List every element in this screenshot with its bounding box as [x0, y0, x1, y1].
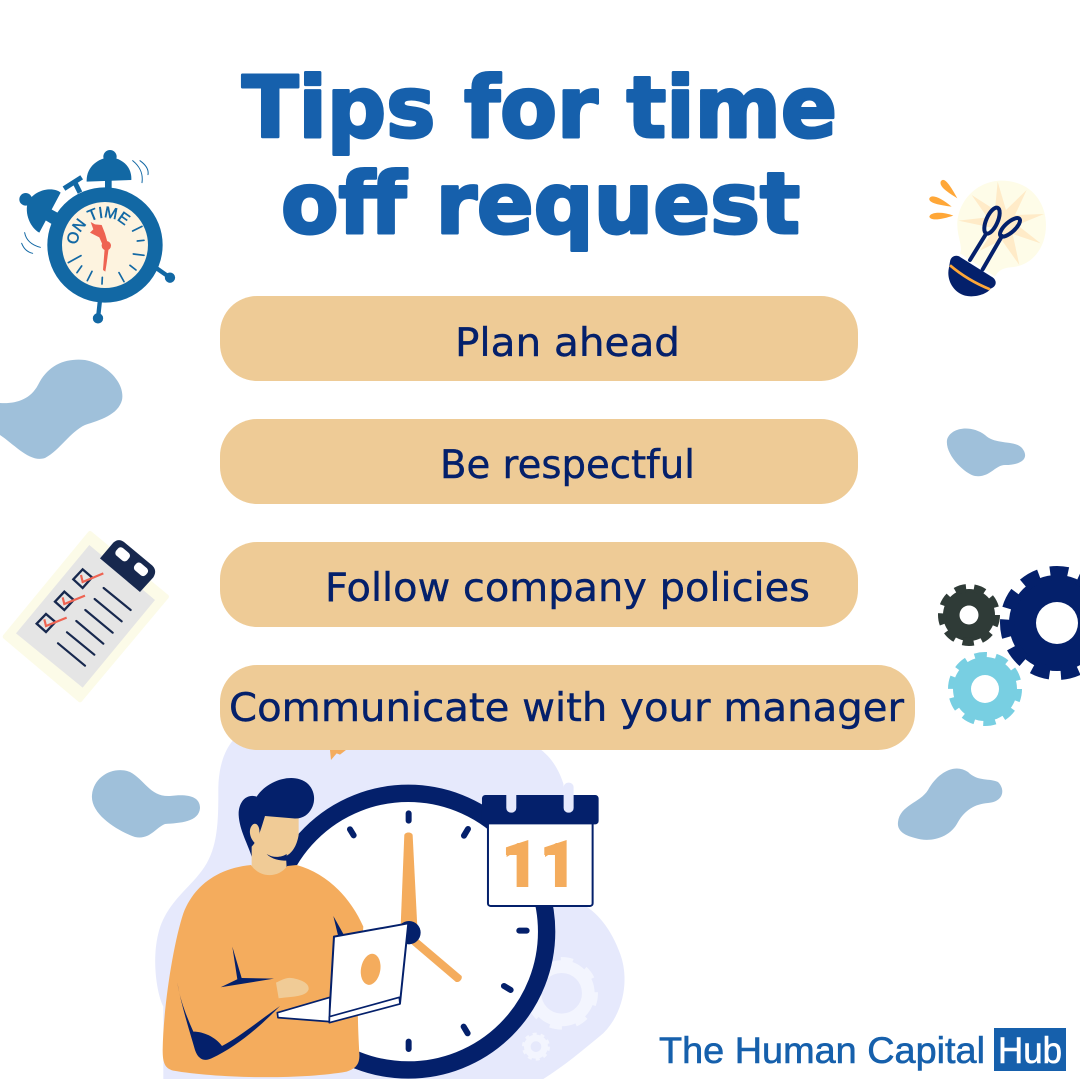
clock body [55, 195, 155, 295]
base stripe [950, 265, 990, 289]
laptop screen [329, 923, 408, 1022]
navy gear [1007, 573, 1080, 673]
icon: alarm clock on time [19, 150, 176, 324]
panel: tip communicate with your manager [220, 665, 915, 750]
sleeve creases [177, 916, 344, 1060]
bulb glow [957, 181, 1046, 277]
decorative blob: left [0, 360, 122, 459]
panel: tip be respectful [220, 419, 858, 504]
spark rays [929, 180, 957, 219]
hair back [239, 796, 267, 857]
clock minute hand [401, 832, 417, 927]
logo: the human capital hub: The Human Capital [659, 1030, 985, 1071]
on time label [78, 218, 125, 245]
beard line [267, 854, 287, 861]
hair top [257, 778, 314, 818]
right bell [87, 150, 131, 192]
clock hands [90, 222, 111, 272]
calendar date: 11 [502, 829, 576, 901]
laptop base [277, 997, 400, 1023]
calendar [482, 783, 599, 906]
panel: tip plan ahead [220, 296, 858, 381]
hand [276, 978, 309, 998]
title [242, 59, 837, 254]
icon: alarm clock on time: ON TIME [67, 206, 131, 244]
clock ticks [68, 226, 144, 284]
title: Tips for time [242, 59, 837, 158]
person [163, 778, 408, 1077]
panel: bottom illustration [155, 740, 625, 1079]
icon: gears [942, 573, 1080, 722]
background gears [523, 960, 595, 1059]
calendar header [482, 795, 599, 824]
decorative blob: right [947, 429, 1025, 476]
icon: light bulb [929, 180, 1046, 296]
body sweater [163, 865, 363, 1077]
calendar page [488, 820, 593, 906]
laptop logo [358, 952, 383, 986]
small orange star [330, 750, 346, 760]
feet [95, 268, 173, 321]
checklist lines [58, 588, 131, 666]
check marks [44, 573, 103, 626]
check boxes [37, 569, 92, 632]
filament [970, 206, 1023, 269]
laptop [277, 923, 408, 1023]
bulb base [948, 256, 996, 296]
decorative blob: lower right [898, 768, 1002, 840]
panel: tip be respectful: Be respectful [440, 443, 695, 488]
dark gear [942, 588, 996, 642]
panel: tip plan ahead: Plan ahead [455, 321, 680, 366]
left bell [19, 189, 61, 233]
calendar rings [506, 783, 574, 813]
title: off request [281, 155, 800, 254]
icon: clipboard checklist [5, 533, 167, 700]
decorative blob: lower left [92, 770, 200, 837]
panel: tip communicate with your manager: Communicate with your manager [229, 686, 905, 731]
clock hour hand [407, 935, 462, 982]
clipboard backing [5, 533, 167, 700]
clock ticks [350, 813, 527, 1049]
light star [958, 182, 1044, 265]
clip holes [114, 546, 150, 578]
ear [250, 824, 259, 843]
panel: tip follow company policies [220, 542, 858, 627]
panel: tip follow company policies: Follow company policies [325, 566, 810, 611]
logo: the human capital hub: Hub [998, 1030, 1062, 1071]
clock center [397, 921, 421, 944]
clip [100, 540, 155, 592]
lavender background blob [155, 740, 625, 1079]
neck and face [252, 816, 299, 880]
ringing marks [22, 161, 148, 253]
light blue gear [952, 656, 1018, 722]
paper [16, 545, 155, 688]
lever [64, 177, 82, 193]
large clock [270, 793, 547, 1070]
